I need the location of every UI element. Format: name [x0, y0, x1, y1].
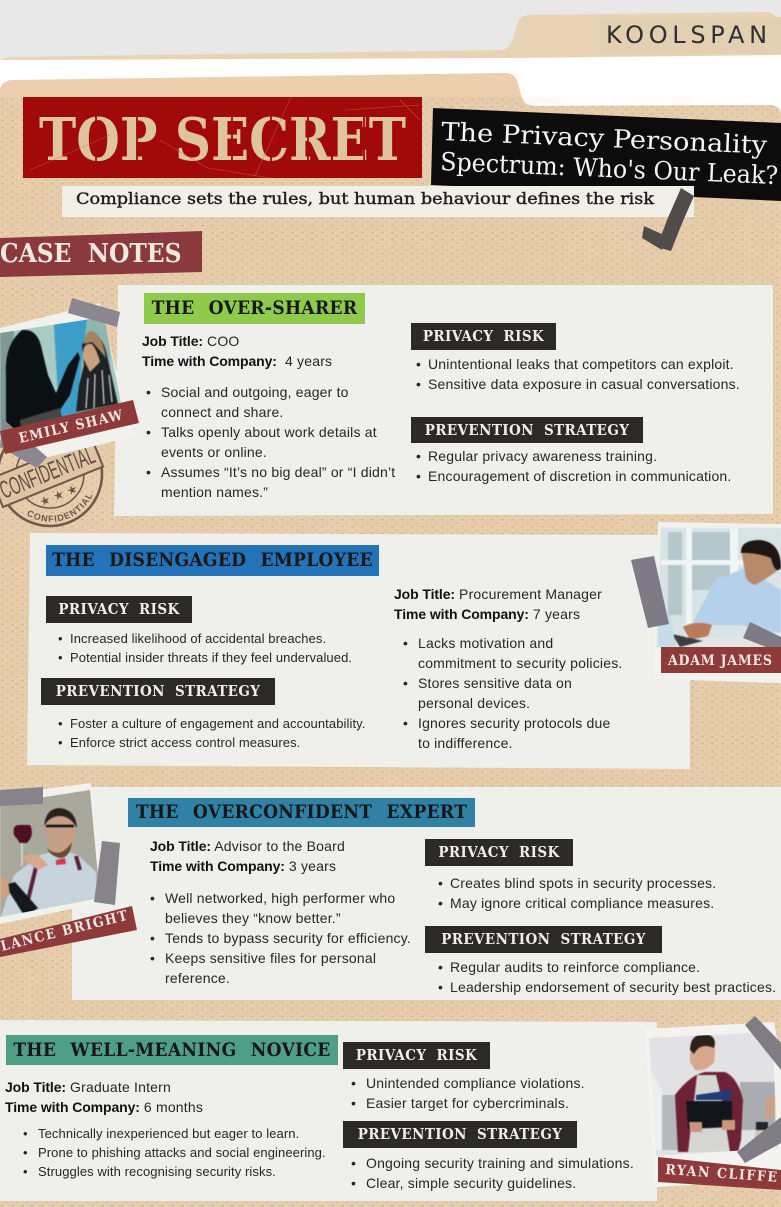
- photo: Adam James: [631, 522, 781, 683]
- heading: the overconfident expert: THE OVERCONFIDENT EXPERT: [136, 801, 467, 823]
- heading: the over-sharer: THE OVER-SHARER: [152, 297, 357, 319]
- traits list: events or online.: [161, 444, 267, 460]
- subtitle note: The Privacy Personality Spectrum: The Privacy Personality: [441, 117, 769, 160]
- privacy risk list: Unintentional leaks that competitors can exploit.: [428, 356, 734, 372]
- job details: Time with Company: 3 years: [150, 858, 336, 874]
- privacy risk list: [416, 356, 740, 392]
- label: prevention strategy: PREVENTION STRATEGY: [56, 682, 260, 700]
- panel: the overconfident expert: [72, 787, 781, 1000]
- tape: [631, 556, 669, 628]
- privacy risk list: Sensitive data exposure in casual conversations.: [428, 376, 740, 392]
- job details: Time with Company: 7 years: [394, 606, 580, 622]
- traits list: Ignores security protocols due: [418, 715, 610, 731]
- traits list: [404, 635, 622, 751]
- prevention list: [416, 448, 731, 484]
- label: privacy risk: [343, 1042, 490, 1069]
- heading: the over-sharer: [144, 293, 365, 324]
- traits list: connect and share.: [161, 404, 284, 420]
- privacy risk list: May ignore critical compliance measures.: [450, 895, 714, 911]
- traits list: commitment to security policies.: [418, 655, 622, 671]
- traits list: [150, 890, 411, 986]
- label: prevention strategy: PREVENTION STRATEGY: [425, 421, 629, 439]
- name tag: Ryan Cliffe: RYAN CLIFFE: [665, 1162, 778, 1186]
- tape: [743, 622, 781, 653]
- traits list: Well networked, high performer who: [165, 890, 395, 906]
- traits list: Talks openly about work details at: [161, 424, 377, 440]
- tape: [0, 418, 47, 468]
- traits list: Social and outgoing, eager to: [161, 384, 349, 400]
- privacy risk list: Creates blind spots in security processes.: [450, 875, 716, 891]
- job details: Job Title: Graduate Intern: [5, 1079, 171, 1095]
- job details: [5, 1079, 203, 1115]
- name tag: Lance Bright: LANCE BRIGHT: [0, 908, 130, 955]
- traits list: mention names.”: [161, 484, 268, 500]
- privacy risk list: Increased likelihood of accidental breaches.: [70, 631, 326, 646]
- tape: [737, 1117, 781, 1163]
- tape: [68, 298, 120, 327]
- heading: the well-meaning novice: THE WELL-MEANING NOVICE: [13, 1039, 331, 1061]
- photo: Lance Bright: [0, 783, 137, 957]
- prevention list: Encouragement of discretion in communication.: [428, 468, 731, 484]
- icon: confidential stamp: [0, 441, 104, 528]
- label: privacy risk: PRIVACY RISK: [438, 843, 560, 861]
- job details: [142, 333, 332, 369]
- traits list: Tends to bypass security for efficiency.: [165, 930, 411, 946]
- traits list: Struggles with recognising security risks.: [38, 1164, 276, 1178]
- name tag: Adam James: ADAM JAMES: [667, 653, 772, 669]
- label: prevention strategy: PREVENTION STRATEGY: [441, 930, 646, 948]
- name tag: Emily Shaw: EMILY SHAW: [17, 407, 125, 447]
- privacy risk list: [352, 1075, 585, 1111]
- panel: the over-sharer: [114, 285, 773, 516]
- panel: the well-meaning novice: [0, 1020, 657, 1201]
- job details: Time with Company: 4 years: [142, 353, 332, 369]
- icon: confidential stamp: ★ ★ ★: [37, 481, 80, 509]
- label: prevention strategy: [425, 926, 662, 953]
- traits list: personal devices.: [418, 695, 530, 711]
- prevention list: Clear, simple security guidelines.: [366, 1175, 576, 1191]
- label: privacy risk: PRIVACY RISK: [423, 327, 544, 345]
- label: privacy risk: [425, 839, 573, 866]
- privacy risk list: Unintended compliance violations.: [366, 1075, 585, 1091]
- name tag: Ryan Cliffe: [658, 1157, 781, 1190]
- prevention list: Foster a culture of engagement and accountability.: [70, 716, 366, 731]
- traits list: Lacks motivation and: [418, 635, 553, 651]
- panel: the disengaged employee: [27, 533, 690, 769]
- photo: Emily Shaw: [0, 298, 139, 468]
- traits list: Technically inexperienced but eager to learn.: [38, 1126, 299, 1140]
- job details: Job Title: Advisor to the Board: [150, 838, 345, 854]
- tape: [0, 787, 43, 806]
- job details: [394, 586, 602, 622]
- name tag: Adam James: [661, 647, 781, 673]
- job details: [150, 838, 345, 874]
- brand: KOOLSPAN: KOOLSPAN: [606, 21, 772, 49]
- prevention list: [438, 959, 776, 995]
- prevention list: [352, 1155, 634, 1191]
- privacy risk list: [438, 875, 716, 911]
- traits list: Keeps sensitive files for personal: [165, 950, 376, 966]
- traits list: to indifference.: [418, 735, 513, 751]
- prevention list: Leadership endorsement of security best practices.: [450, 979, 776, 995]
- traits list: [146, 384, 396, 500]
- section tag: CASE NOTES: [0, 231, 202, 277]
- label: prevention strategy: PREVENTION STRATEGY: [358, 1125, 562, 1143]
- tape: [94, 841, 120, 905]
- traits list: reference.: [165, 970, 230, 986]
- job details: Job Title: Procurement Manager: [394, 586, 602, 602]
- label: privacy risk: PRIVACY RISK: [356, 1046, 477, 1064]
- section tag: CASE NOTES: CASE NOTES: [0, 239, 182, 269]
- label: prevention strategy: [41, 678, 275, 705]
- label: privacy risk: [46, 596, 192, 623]
- traits list: Prone to phishing attacks and social engineering.: [38, 1144, 326, 1160]
- label: prevention strategy: [411, 417, 643, 443]
- traits list: Assumes “It’s no big deal” or “I didn’t: [161, 464, 395, 480]
- prevention list: Enforce strict access control measures.: [70, 735, 300, 750]
- photo: Ryan Cliffe: [649, 1016, 781, 1190]
- label: privacy risk: PRIVACY RISK: [58, 600, 180, 618]
- job details: Job Title: COO: [142, 333, 240, 349]
- tagline strip: Compliance sets the rules, but human behaviour defines the risk: [76, 189, 654, 208]
- icon: confidential stamp: CONFIDENTIAL: [28, 494, 92, 522]
- job details: Time with Company: 6 months: [5, 1099, 203, 1115]
- prevention list: [58, 716, 366, 750]
- label: prevention strategy: [343, 1121, 577, 1148]
- prevention list: Ongoing security training and simulations.: [366, 1155, 634, 1171]
- heading: the disengaged employee: [46, 545, 379, 576]
- subtitle note: The Privacy Personality Spectrum: [431, 108, 781, 201]
- traits list: believes they “know better.”: [165, 910, 341, 926]
- tagline strip: [62, 186, 694, 217]
- heading: the disengaged employee: THE DISENGAGED EMPLOYEE: [52, 549, 373, 571]
- traits list: [24, 1126, 326, 1178]
- prevention list: Regular privacy awareness training.: [428, 448, 657, 464]
- privacy risk list: Easier target for cybercriminals.: [366, 1095, 569, 1111]
- traits list: Stores sensitive data on: [418, 675, 572, 691]
- privacy risk list: [58, 631, 352, 665]
- name tag: Emily Shaw: [0, 400, 139, 454]
- icon: tape cross: [642, 188, 694, 251]
- privacy risk list: Potential insider threats if they feel undervalued.: [70, 650, 352, 665]
- label: privacy risk: [411, 323, 556, 350]
- tape: [745, 1016, 781, 1070]
- prevention list: Regular audits to reinforce compliance.: [450, 959, 700, 975]
